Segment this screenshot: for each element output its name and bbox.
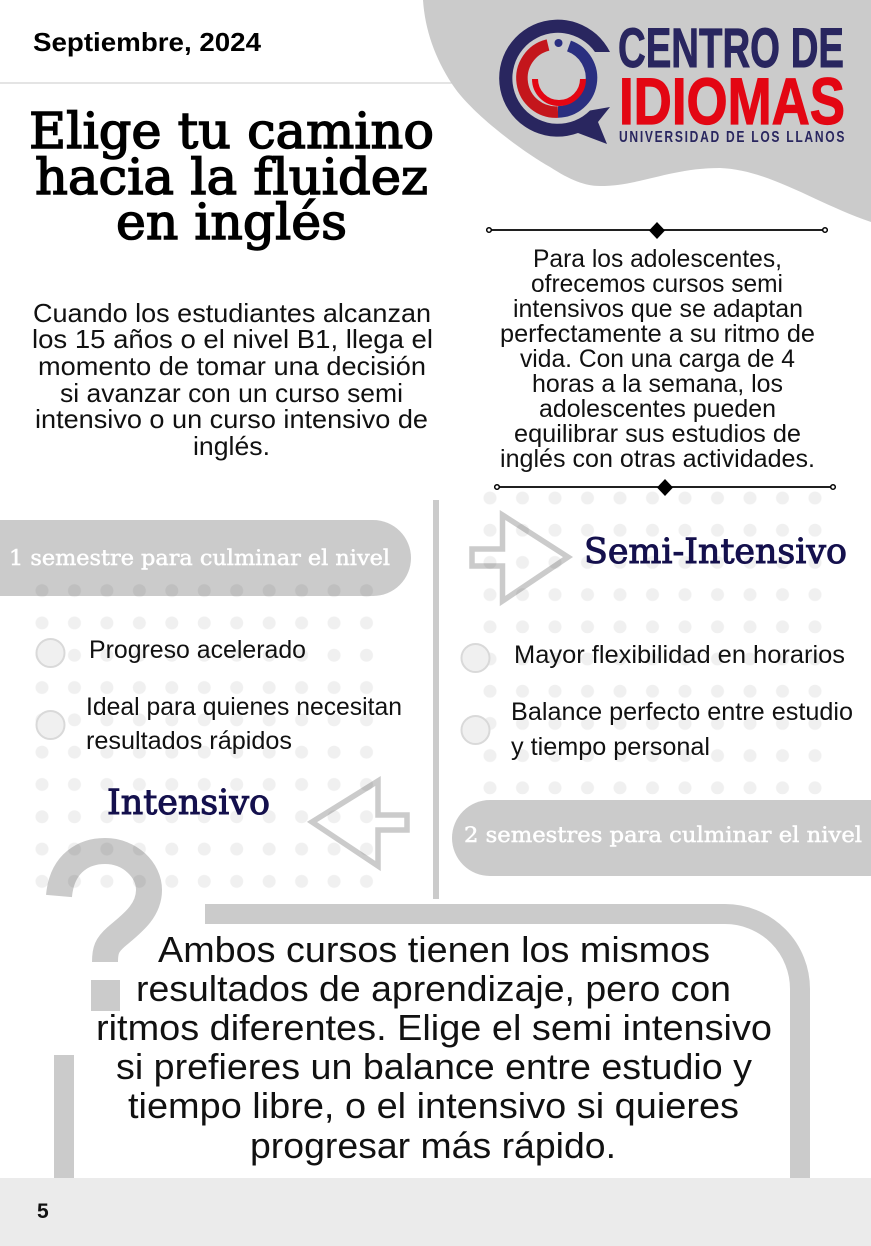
logo (499, 16, 845, 145)
list: semi-intensive benefits (462, 641, 853, 761)
benefit: Ideal para quienes necesitan (86, 693, 402, 721)
heading: semi-intensive: Semi-Intensivo (584, 532, 847, 572)
intro text: Cuando los estudiantes alcanzan (33, 298, 431, 328)
bullet (462, 716, 490, 744)
bullet (462, 644, 490, 672)
intro text (32, 298, 433, 461)
benefit: Progreso acelerado (89, 636, 306, 664)
intro text: inglés. (193, 431, 270, 461)
pill: semi-intensive duration: 2 semestres para culminar el nivel (464, 823, 862, 847)
summary text: progresar más rápido. (250, 1125, 616, 1166)
right paragraph: inglés con otras actividades. (500, 445, 815, 473)
pill: intensive duration: 1 semestre para culminar el nivel (9, 546, 390, 570)
arrow: intensive (312, 781, 407, 866)
intro text: los 15 años o el nivel B1, llega el (32, 324, 433, 354)
bullet (36, 639, 64, 667)
right paragraph: vida. Con una carga de 4 (520, 345, 795, 373)
summary text: Ambos cursos tienen los mismos (158, 929, 710, 970)
summary frame (64, 914, 800, 1178)
right paragraph: horas a la semana, los (532, 370, 783, 398)
page number: 5 (37, 1200, 49, 1223)
pill: intensive duration (0, 520, 411, 596)
header blob (423, 0, 871, 222)
bullet (36, 711, 64, 739)
benefit (511, 698, 853, 761)
summary text: ritmos diferentes. Elige el semi intensivo (96, 1007, 772, 1048)
right paragraph: ofrecemos cursos semi (531, 270, 783, 298)
right paragraph: perfectamente a su ritmo de (500, 320, 815, 348)
footer (0, 1178, 871, 1246)
logo speech ring (499, 20, 610, 144)
date: Septiembre, 2024 (33, 27, 262, 57)
logo red arc (522, 45, 558, 112)
bottom divider (495, 479, 835, 496)
right paragraph: Para los adolescentes, (533, 245, 782, 273)
arrow: semi-intensive (472, 515, 568, 601)
logo inner disc (529, 50, 587, 108)
right paragraph: intensivos que se adaptan (513, 295, 803, 323)
right paragraph (500, 245, 815, 473)
intro text: si avanzar con un curso semi (60, 378, 403, 408)
summary text: si prefieres un balance entre estudio y (116, 1046, 752, 1087)
summary text: tiempo libre, o el intensivo si quieres (128, 1085, 739, 1126)
summary text (96, 929, 772, 1166)
icon: question mark (59, 851, 149, 1011)
benefit (86, 693, 402, 755)
summary text: resultados de aprendizaje, pero con (136, 968, 731, 1009)
right paragraph: equilibrar sus estudios de (514, 420, 801, 448)
heading: intensive: Intensivo (107, 783, 270, 823)
top divider (487, 222, 827, 239)
logo dot (554, 39, 562, 47)
benefit: Balance perfecto entre estudio (511, 698, 853, 726)
logo smile (535, 79, 583, 103)
list: intensive benefits (36, 636, 402, 755)
logo line 3: UNIVERSIDAD DE LOS LLANOS (619, 128, 844, 145)
right paragraph: adolescentes pueden (539, 395, 776, 423)
pill: semi-intensive duration (452, 800, 871, 876)
title (29, 102, 434, 251)
benefit: Mayor flexibilidad en horarios (514, 641, 845, 669)
title: hacia la fluidez (35, 148, 428, 206)
benefit: y tiempo personal (511, 733, 710, 761)
title: Elige tu camino (29, 102, 434, 160)
title: en inglés (116, 193, 347, 251)
intro text: intensivo o un curso intensivo de (35, 404, 428, 434)
intro text: momento de tomar una decisión (38, 351, 426, 381)
benefit: resultados rápidos (86, 727, 292, 755)
logo blue arc (558, 46, 592, 112)
